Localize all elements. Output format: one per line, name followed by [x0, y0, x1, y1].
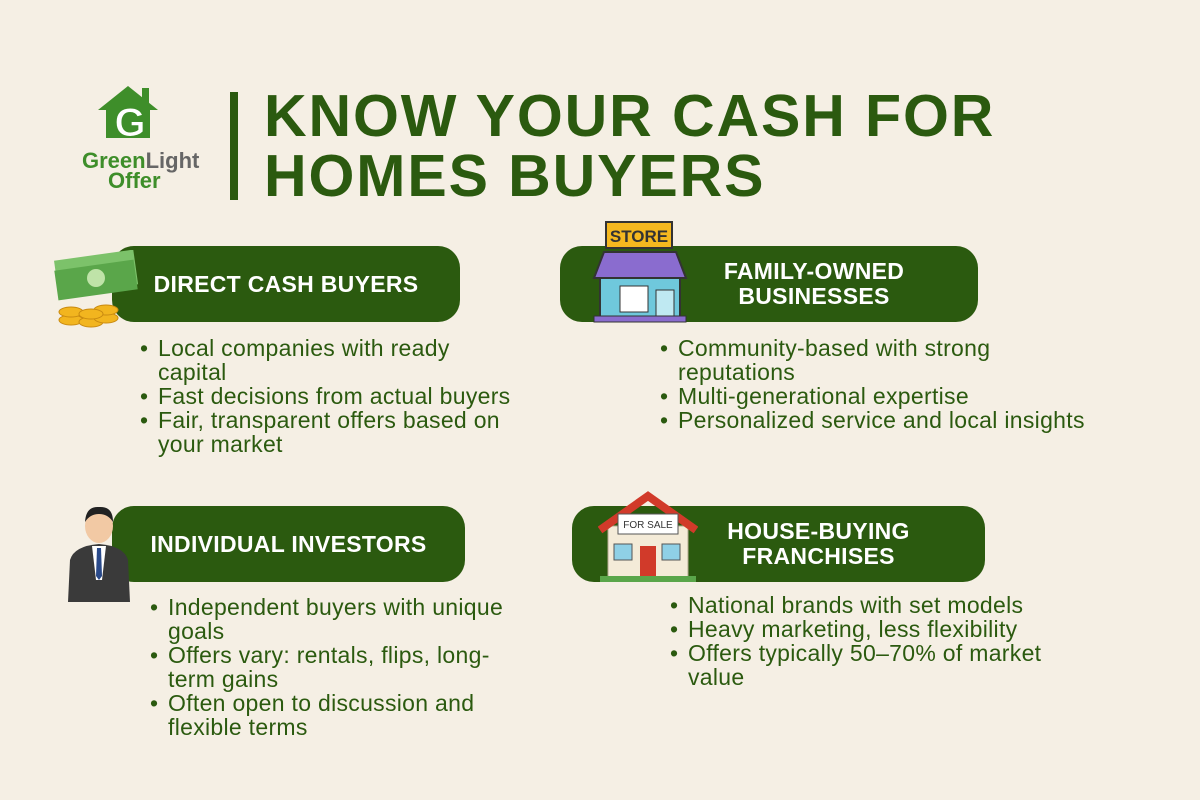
heading pill: [112, 506, 465, 582]
heading pill: HOUSE-BUYING: [727, 518, 910, 544]
heading pill: [112, 246, 460, 322]
heading pill: [572, 506, 985, 582]
bullets: capital: [158, 359, 227, 385]
bullets: Heavy marketing, less flexibility: [688, 616, 1017, 642]
bullets: Independent buyers with unique goals: [168, 594, 503, 644]
bullets: [140, 335, 510, 457]
title: KNOW YOUR CASH FOR: [264, 83, 995, 149]
heading pill: INDIVIDUAL INVESTORS: [150, 530, 427, 556]
bullets: your market: [158, 431, 283, 457]
logo: [82, 86, 200, 190]
bullets: Local companies with ready: [158, 335, 450, 361]
panel: individual investors: [68, 506, 503, 740]
logo: GreenLight: [82, 148, 200, 173]
bullets: Personalized service and local insights: [678, 407, 1085, 433]
bullets: Offers typically 50–70% of market value: [688, 640, 1041, 690]
icon: for-sale house: [598, 491, 698, 582]
heading pill: FAMILY-OWNED: [724, 258, 904, 284]
bullets: [150, 594, 503, 740]
panel: direct cash buyers: [54, 246, 510, 457]
bullets: Fast decisions from actual buyers: [158, 383, 510, 409]
icon: store: [592, 221, 688, 322]
title: HOMES BUYERS: [264, 143, 765, 209]
icon: for-sale house: FOR SALE: [623, 520, 673, 531]
logo: G: [114, 101, 146, 145]
bullets: [670, 592, 1041, 690]
bullets: National brands with set models: [688, 592, 1023, 618]
bullets: Often open to discussion and flexible terms: [168, 690, 474, 740]
bullets: Community-based with strong: [678, 335, 990, 361]
heading pill: FRANCHISES: [742, 543, 895, 569]
heading pill: [560, 246, 978, 322]
panel: house-buying franchises: [572, 491, 1041, 690]
icon: businessman: [68, 507, 130, 602]
bullets: Multi-generational expertise: [678, 383, 969, 409]
bullets: [660, 335, 1085, 433]
heading pill: DIRECT CASH BUYERS: [154, 270, 418, 296]
bullets: Fair, transparent offers based on: [158, 407, 500, 433]
title: [264, 83, 995, 209]
heading pill: BUSINESSES: [738, 283, 890, 309]
bullets: Offers vary: rentals, flips, long-term gains: [168, 642, 490, 692]
panel: family-owned businesses: [560, 221, 1085, 433]
icon: money: [54, 250, 138, 328]
icon: store: STORE: [610, 227, 668, 246]
bullets: reputations: [678, 359, 795, 385]
